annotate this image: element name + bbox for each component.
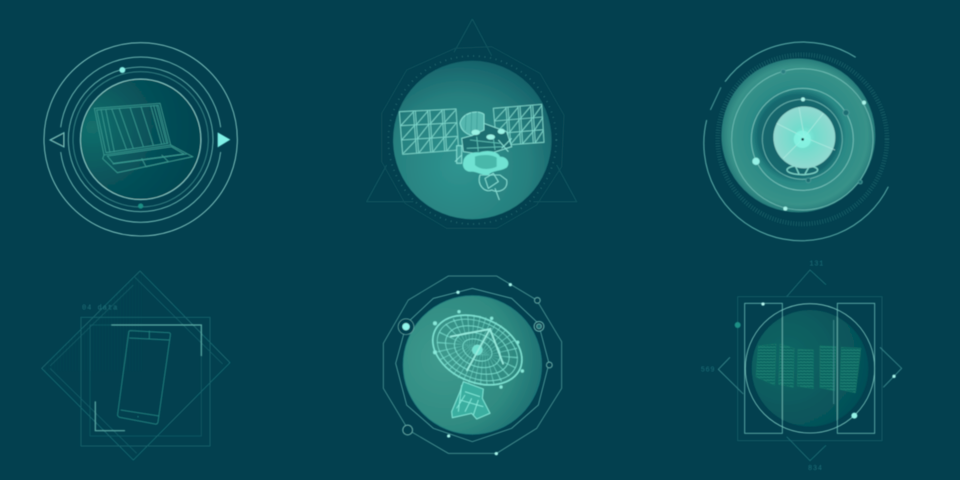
outer polygon frame [382, 47, 564, 228]
left solar panel [399, 109, 459, 154]
marker dots [119, 67, 143, 209]
icon: radar dish [773, 106, 835, 168]
numeric labels [701, 260, 824, 473]
tick ring [388, 56, 556, 224]
panel: radar hologram [704, 42, 888, 241]
satellite body [455, 112, 512, 200]
markers [735, 302, 896, 419]
globe [393, 61, 552, 219]
panel: phone hologram [42, 271, 230, 460]
hatch ring [718, 55, 887, 224]
square frames [81, 317, 210, 446]
numeric labels: 834 [808, 465, 823, 473]
corner brackets [95, 325, 201, 431]
panel: antenna hologram [383, 276, 562, 455]
orbit markers [752, 69, 866, 211]
orbit rings [732, 69, 873, 210]
rotated diamonds [42, 271, 230, 460]
panel: server hologram [701, 260, 902, 473]
diamond brackets [718, 270, 902, 461]
inner polygon frame [396, 288, 549, 442]
satellite bright parts [463, 129, 508, 175]
icon: antenna dish [422, 302, 533, 398]
outer arcs [704, 42, 888, 241]
icon: server racks [756, 344, 861, 393]
rack panels and circle [745, 303, 875, 433]
outer polygon frame [383, 276, 562, 453]
hatched backdrop [44, 277, 136, 371]
icon: dish base [787, 165, 818, 175]
globe [752, 310, 868, 427]
ring nodes [398, 283, 552, 455]
outer square frame [738, 297, 882, 441]
numeric labels: 131 [809, 260, 824, 268]
radar disc [721, 58, 875, 212]
label: 04 data [82, 305, 118, 313]
panel: laptop hologram [44, 43, 237, 236]
globe [403, 296, 542, 434]
arrow: left outline [50, 133, 64, 147]
numeric labels: 569 [701, 367, 715, 375]
backdrop triangles [367, 19, 577, 202]
arrow: right solid [218, 132, 230, 147]
concentric rings [44, 43, 237, 236]
inner disc [80, 79, 201, 200]
panel: satellite hologram [367, 19, 577, 228]
icon: laptop [94, 103, 193, 173]
right solar panel [493, 104, 544, 146]
icon: smartphone [118, 331, 170, 424]
icon: antenna pedestal [452, 382, 490, 419]
